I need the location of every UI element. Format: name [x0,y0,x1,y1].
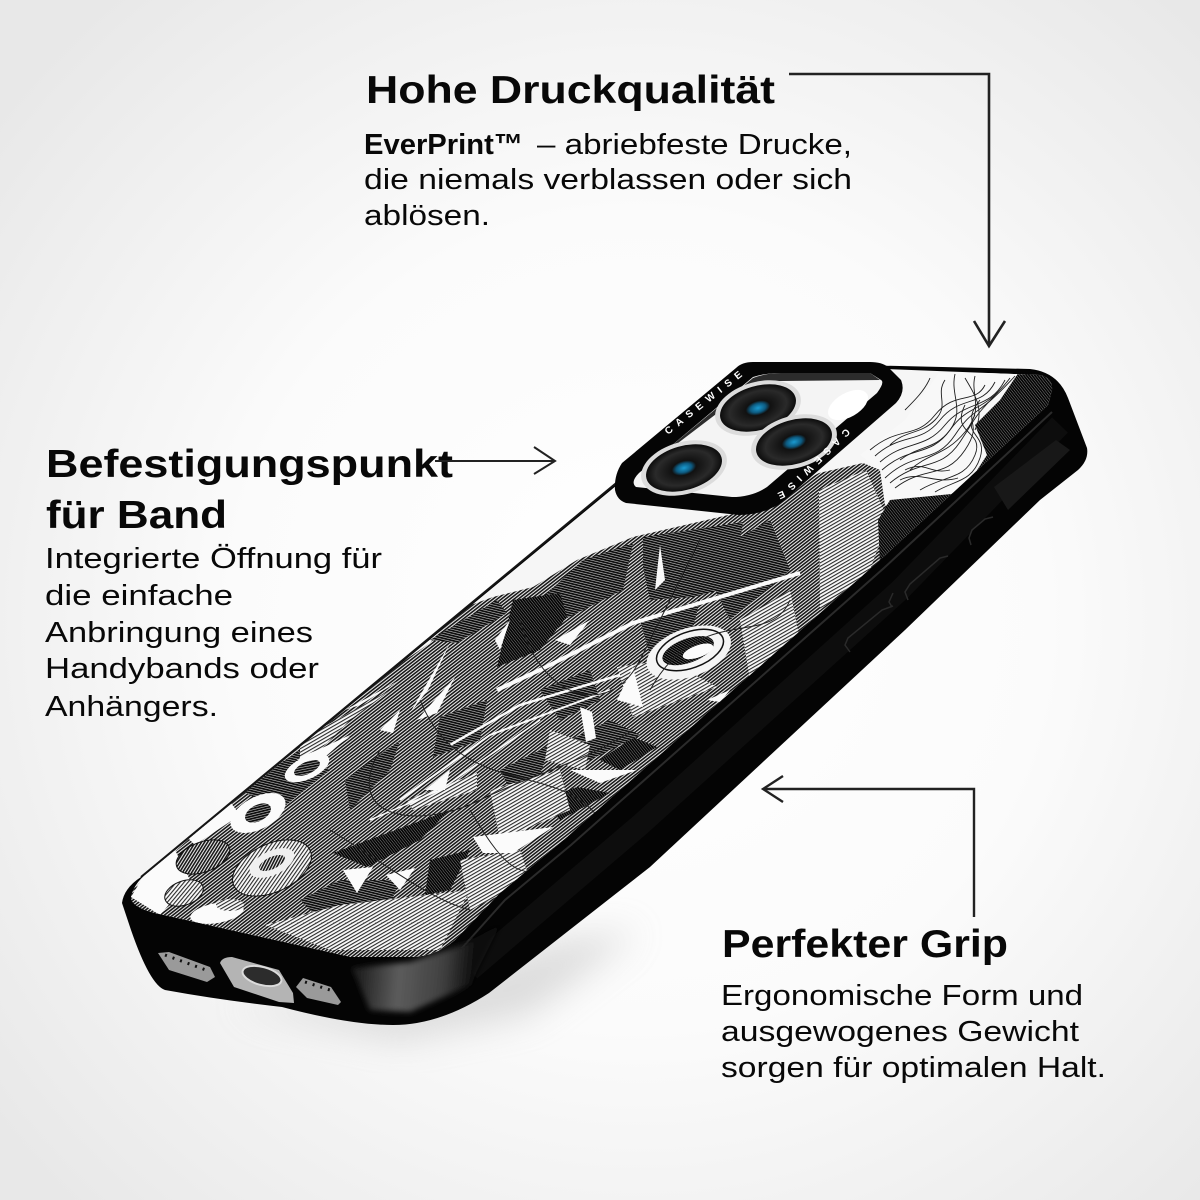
hair line section [860,373,1025,505]
eye drawing [646,626,731,680]
white back plate [131,369,1052,957]
phone drop shadow [230,930,640,1040]
callout: Hohe Druckqualität [364,69,852,232]
arrow: strap attachment [435,447,555,474]
left plate edge line [141,397,720,877]
dark hatch corner [878,372,1060,565]
heading: Perfekter Grip [722,923,1008,966]
camera opening [634,373,882,497]
body text: Integrierte Öffnung für [45,543,382,575]
camera ring logo lower: CASEWISE [777,430,850,500]
strap slot recess [994,440,1070,510]
white streak lines [370,573,800,820]
body text: Anhängers. [45,691,218,723]
charging port [220,957,294,1003]
body text: die niemals verblassen oder sich [364,164,852,196]
arrow: grip [763,776,974,917]
body text: – abriebfeste Drucke, [537,129,852,161]
heading: Hohe Druckqualität [366,69,775,112]
body text [364,129,852,232]
callout: Befestigungspunkt für Band [45,443,453,723]
body text [45,543,382,723]
bottom cell shapes [131,735,350,928]
inner lip line [462,412,1052,948]
body text: sorgen für optimalen Halt. [721,1052,1106,1084]
camera ring logo upper: CASEWISE [665,370,742,434]
lens left [635,431,733,505]
case side highlight [470,425,1060,970]
main hatched artwork [100,463,900,980]
callout: Perfekter Grip [721,923,1106,1084]
heading: Befestigungspunkt [46,443,453,486]
body text: die einfache [45,580,233,612]
dark hatch patches [240,520,790,930]
body text: ablösen. [364,200,490,232]
camera module [614,362,903,515]
heading [46,443,453,537]
inner ring shadow [640,373,880,472]
print plate [131,369,1052,957]
body text: ausgewogenes Gewicht [721,1016,1079,1048]
body text [721,980,1106,1084]
body text: Ergonomische Form und [721,980,1083,1012]
phone case [122,362,1088,1025]
arrow: print quality [789,74,1005,346]
bottom speaker grille right [296,978,341,1005]
body text: EverPrint™ [364,129,523,161]
lens right [745,405,843,479]
camera highlight [823,384,873,426]
case body [122,364,1087,1025]
white shards [300,545,730,893]
lens top [709,371,807,445]
scribble lines [330,540,790,910]
body text: Handybands oder [45,653,319,685]
bottom speaker grille left [158,952,215,982]
body text: Anbringung eines [45,617,313,649]
heading: für Band [46,494,227,537]
side buttons [845,517,993,652]
light hatch patches [265,470,888,950]
corner sheen [352,925,500,1012]
camera ring [615,362,903,515]
